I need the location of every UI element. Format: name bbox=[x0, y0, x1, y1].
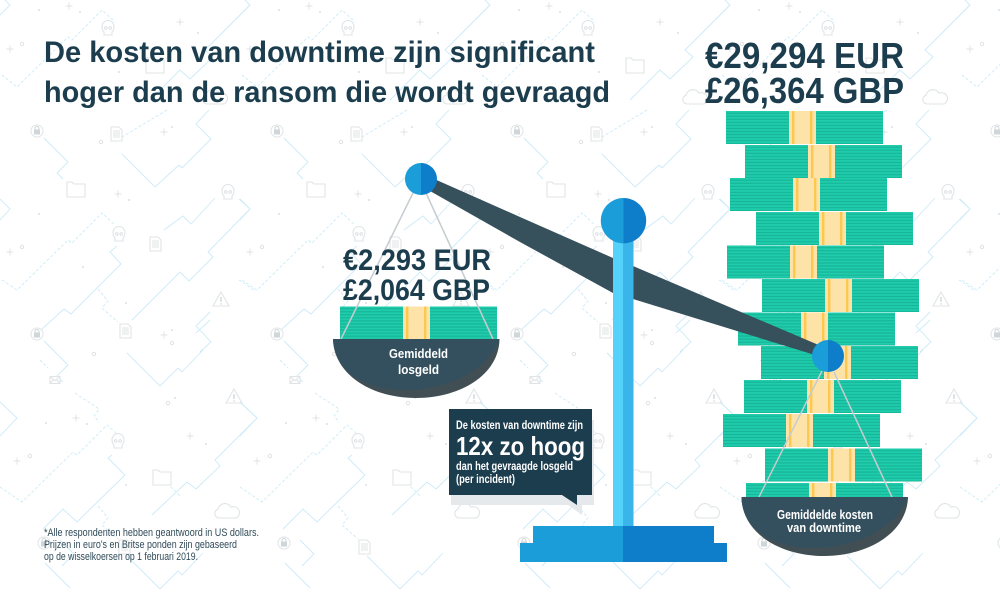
footnote bbox=[44, 527, 259, 563]
money stack: ransom bbox=[340, 306, 497, 340]
amount: cost of downtime: €29,294 EUR bbox=[705, 35, 904, 76]
footnote: Prijzen in euro's en Britse ponden zijn gebaseerd bbox=[44, 539, 237, 551]
amount: ransom: €2,293 EUR bbox=[343, 244, 491, 277]
footnote: op de wisselkoersen op 1 februari 2019. bbox=[44, 551, 198, 563]
label: average ransom: losgeld bbox=[398, 362, 439, 377]
right pan with chains bbox=[742, 340, 908, 556]
money stack: downtime bbox=[723, 111, 922, 516]
title: De kosten van downtime zijn significant bbox=[44, 36, 595, 69]
pivot circle bbox=[601, 198, 646, 243]
title bbox=[44, 36, 610, 109]
amount: cost of downtime: £26,364 GBP bbox=[705, 70, 904, 111]
label: average downtime cost: Gemiddelde kosten bbox=[777, 507, 873, 522]
amount: cost of downtime bbox=[705, 35, 904, 111]
label: average ransom: Gemiddeld bbox=[389, 346, 448, 361]
label: average ransom bbox=[389, 346, 448, 377]
scale base bbox=[520, 526, 727, 562]
footnote: *Alle respondenten hebben geantwoord in US dollars. bbox=[44, 527, 259, 539]
callout: De kosten van downtime zijn bbox=[456, 420, 583, 432]
callout bbox=[449, 409, 594, 515]
scale column bbox=[613, 235, 634, 527]
callout: dan het gevraagde losgeld bbox=[456, 461, 573, 473]
scale beam bbox=[430, 178, 828, 359]
label: average downtime cost bbox=[777, 507, 873, 535]
title: hoger dan de ransom die wordt gevraagd bbox=[44, 76, 610, 109]
left pan with chains bbox=[333, 163, 500, 398]
callout: 12x zo hoog bbox=[456, 431, 585, 461]
label: average downtime cost: van downtime bbox=[787, 520, 861, 535]
amount: ransom bbox=[343, 244, 491, 307]
amount: ransom: £2,064 GBP bbox=[343, 274, 490, 307]
callout: (per incident) bbox=[456, 474, 515, 486]
